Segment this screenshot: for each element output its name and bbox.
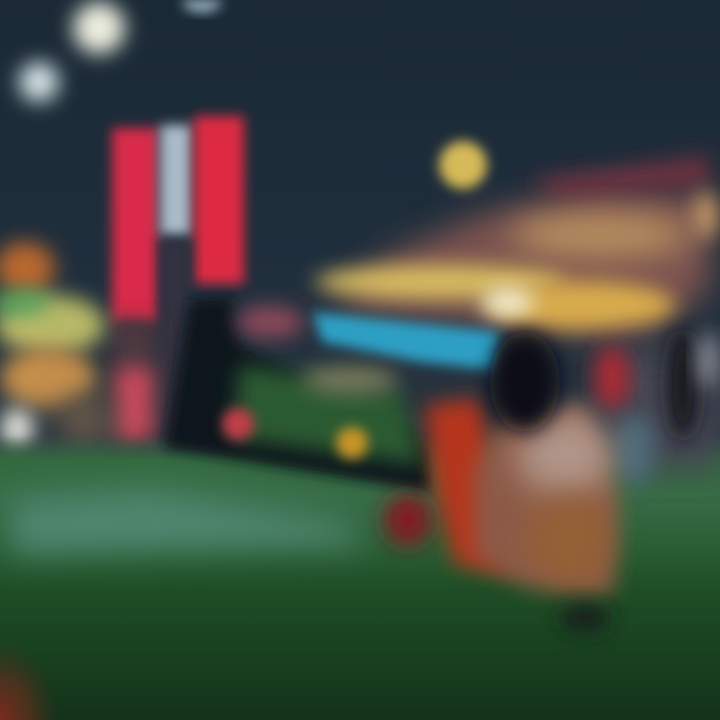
person: dark hand at bottom [559,603,611,633]
moon: yellow light [439,141,487,189]
stand: blue section [312,312,500,370]
person: dark head [490,332,560,432]
flag: red and white banner [112,116,244,440]
phone screen: green field on screen [222,306,425,465]
person: red sleeve and back [384,398,618,595]
pitch: grass field [0,435,720,720]
phone: dark smartphone body [165,298,432,492]
stand: left coloured building [0,242,113,448]
stadium: illuminated stand [315,155,718,340]
foreground: red blur bottom left [0,640,60,720]
crowd: right background figures [594,330,720,485]
floodlights: top left [19,0,222,102]
pitch highlight: pale reflection [10,490,370,555]
